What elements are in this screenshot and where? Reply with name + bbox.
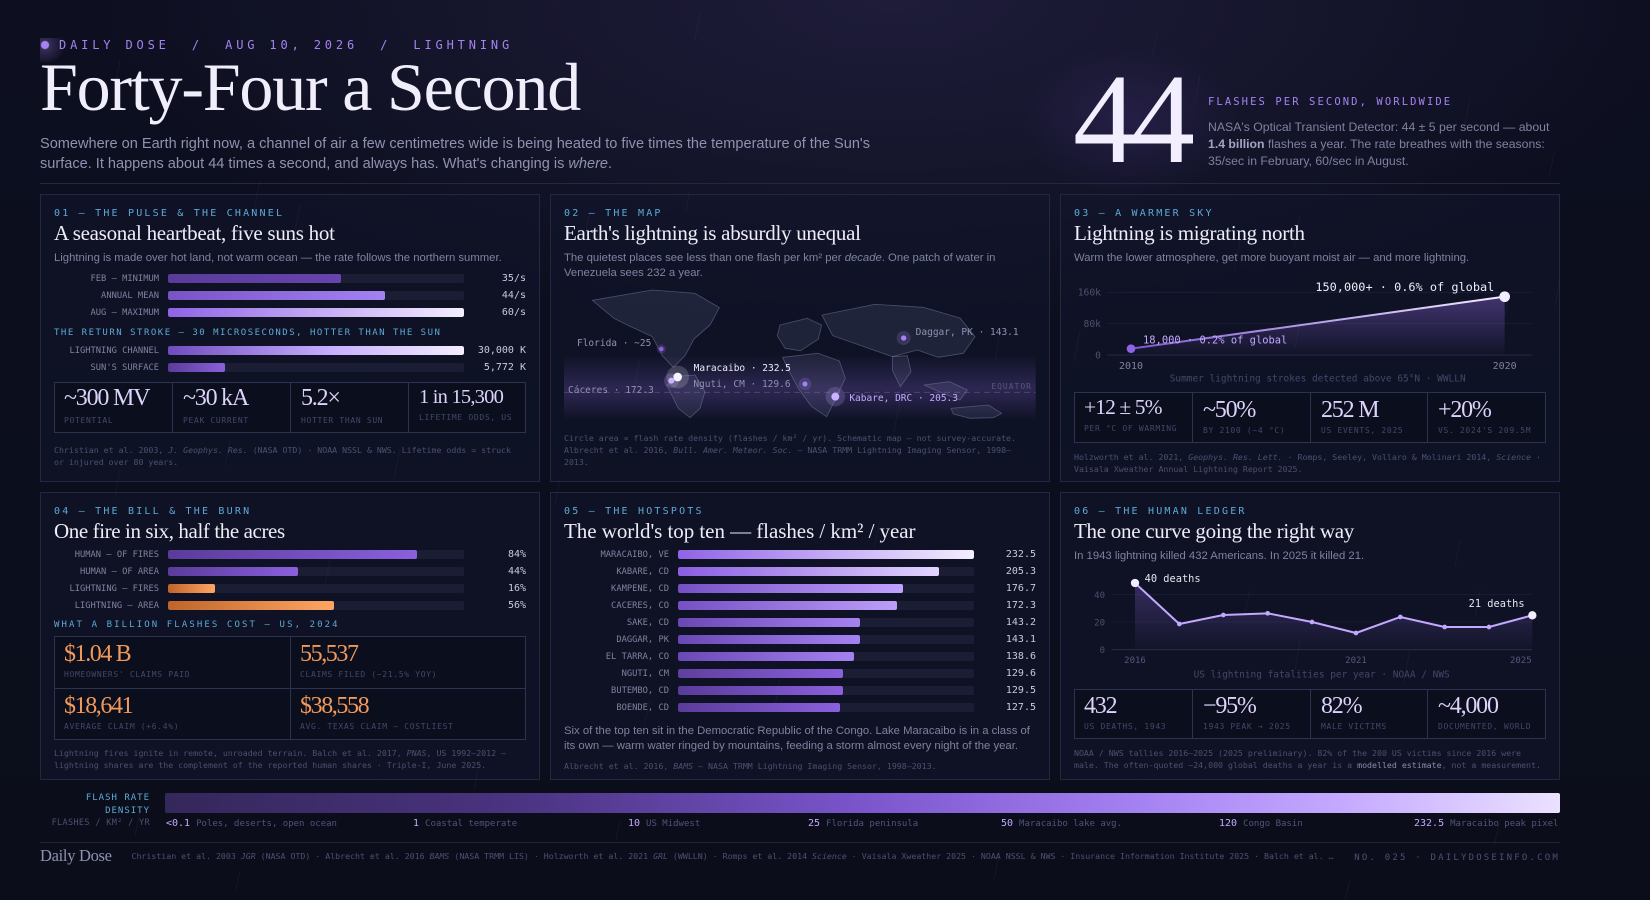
legend unit: FLASHES / KM² / YR	[52, 818, 150, 828]
bar: august	[90, 307, 526, 318]
bar: El Tarra: EL TARRA, CO	[606, 652, 669, 662]
map labels: Kabare, DRC · 205.3	[849, 393, 958, 404]
legend name: FLASH RATE	[86, 793, 150, 803]
map labels: Nguti, CM · 129.6	[693, 379, 791, 390]
bar: Daggar: 143.1	[1006, 634, 1036, 645]
stat: lifetime odds	[408, 382, 526, 433]
bar: human area	[80, 566, 526, 577]
bar: Maracaibo: 232.5	[1006, 549, 1036, 560]
x-axis labels	[1119, 361, 1517, 372]
bar: february: 35/s	[502, 273, 526, 284]
panel 6 footnote: NOAA / NWS tallies 2016–2025 (2025 preliminary). 82% of the 200 US victims since 2016 were	[1074, 748, 1521, 758]
bar: Kabare: KABARE, CD	[616, 567, 669, 577]
bar: Butembo	[611, 685, 1036, 696]
panel 5 heading: The world's top ten — flashes / km² / year	[564, 519, 916, 543]
footer citations: Christian et al. 2003 JGR (NASA OTD) · Albrecht et al. 2016 BAMS (NASA TRMM LIS) · Holzworth et al. 2021 GRL (WWLLN) · Romps et al. 2014 Science · Vaisala Xweather 2025 · NOAA NSSL & NWS · Insurance Information Institute 2025 · Balch et al. ………	[132, 851, 1336, 861]
bar: Maracaibo	[600, 549, 1036, 560]
panel 3 eyebrow: 03 — A WARMER SKY	[1074, 208, 1214, 219]
panel 4 footnote: lightning shares are the complement of the reported human shares · Triple-I, June 2025.	[54, 760, 486, 770]
x-axis labels: 2020	[1493, 361, 1517, 372]
point 2010	[1127, 344, 1135, 353]
stat: documented world	[1427, 689, 1546, 739]
bar: Boende	[616, 702, 1036, 713]
panel: the hotspots	[550, 492, 1050, 780]
x-axis labels	[1124, 656, 1532, 666]
panel 6 footnote	[1074, 747, 1541, 771]
hero description: 1.4 billion flashes a year. The rate breathes with the seasons:	[1208, 137, 1545, 151]
stat: male victims: MALE VICTIMS	[1321, 722, 1387, 731]
bar: annual mean	[101, 290, 526, 301]
legend gradient bar	[165, 793, 1560, 813]
hero description	[1208, 120, 1550, 168]
bar: Caceres: CACERES, CO	[611, 601, 669, 611]
stat: decline	[1192, 689, 1310, 739]
line chart: northern strokes	[1078, 280, 1532, 384]
dot: Florida	[657, 344, 666, 354]
stat: versus 2024: +20%	[1438, 397, 1491, 423]
hero description: NASA's Optical Transient Detector: 44 ± 5 per second — about	[1208, 120, 1549, 134]
stat: per degree: +12 ± 5%	[1084, 395, 1162, 419]
legend name	[86, 792, 150, 818]
x-axis labels: 2010	[1119, 361, 1143, 372]
stat: peak current: ~30 kA	[183, 385, 248, 411]
bar: Kampene	[611, 583, 1036, 594]
map labels	[568, 327, 1019, 404]
bar chart: seasonal rate	[90, 273, 526, 318]
legend stop: 120: 120 Congo Basin	[1219, 818, 1303, 829]
bar: Sake	[627, 617, 1036, 628]
continents	[592, 290, 1002, 418]
dot: Maracaibo	[666, 366, 689, 388]
bar: lightning channel	[69, 345, 526, 356]
map labels: Cáceres · 172.3	[568, 385, 654, 396]
stat row	[54, 382, 526, 433]
stat: us events	[1310, 392, 1427, 443]
dot: Nguti	[799, 378, 811, 390]
panel: the bill and the burn	[40, 492, 540, 780]
data points	[1177, 611, 1491, 635]
cost subheading: WHAT A BILLION FLASHES COST — US, 2024	[54, 620, 340, 630]
bar: Caceres: 172.3	[1006, 600, 1036, 611]
panel 6 heading: The one curve going the right way	[1074, 519, 1354, 543]
hero description: 35/sec in February, 60/sec in August.	[1208, 154, 1409, 168]
eyebrow text: DAILY DOSE / AUG 10, 2026 / LIGHTNING	[59, 38, 513, 52]
stat: us events: 252 M	[1321, 397, 1378, 423]
stat: potential: ~300 MV	[64, 385, 149, 411]
bar: human area: 44%	[508, 566, 526, 577]
bar: lightning channel: 30,000 K	[478, 345, 526, 356]
intro paragraph	[40, 136, 870, 172]
stat: lifetime odds: LIFETIME ODDS, US	[419, 413, 512, 422]
panel 2 description: Venezuela sees 232 a year.	[564, 267, 703, 279]
panel 3 footnote: Vaisala Xweather Annual Lightning Report 2025.	[1074, 464, 1302, 474]
y-axis labels: 0	[1100, 646, 1105, 656]
bar: lightning fires: LIGHTNING — FIRES	[69, 584, 159, 594]
panel 3 description: Warm the lower atmosphere, get more buoyant moist air — and more lightning.	[1074, 252, 1469, 264]
stat: by 2100: BY 2100 (~4 °C)	[1203, 426, 1285, 435]
schematic world map	[564, 290, 1036, 419]
hero label: FLASHES PER SECOND, WORLDWIDE	[1208, 96, 1452, 108]
panel 5 commentary: Six of the top ten sit in the Democratic Republic of the Congo. Lake Maracaibo is in a class of	[564, 725, 1030, 737]
y-axis labels: 40	[1094, 591, 1105, 601]
bar: august: 60/s	[502, 307, 526, 318]
stat: potential	[64, 385, 150, 425]
panel 6 footnote: male. The often-quoted ~24,000 global deaths a year is a modelled estimate, not a measurement.	[1074, 760, 1541, 770]
point 2020	[1499, 291, 1510, 302]
stat row	[1074, 689, 1546, 739]
bar: human fires: 84%	[508, 549, 526, 560]
label 150,000: 150,000+ · 0.6% of global	[1315, 280, 1494, 294]
stat: 1943 deaths: 432	[1084, 693, 1116, 719]
chart caption: Summer lightning strokes detected above 65°N · WWLLN	[1170, 373, 1466, 384]
panel 1 heading: A seasonal heartbeat, five suns hot	[54, 221, 335, 245]
intro paragraph: surface. It happens about 44 times a second, and always has. What's changing is where.	[40, 156, 612, 172]
bar: lightning area: 56%	[508, 600, 526, 611]
stat: hotter than sun	[290, 382, 408, 433]
panel: a warmer sky	[1060, 194, 1560, 482]
dot: Daggar	[897, 331, 911, 345]
panel 4 heading: One fire in six, half the acres	[54, 519, 285, 543]
legend title	[40, 792, 150, 829]
stat: texas claim: $38,558	[300, 693, 368, 719]
cost stats grid	[54, 636, 526, 740]
legend stop: 1: 1 Coastal temperate	[413, 818, 517, 829]
stat: documented world: DOCUMENTED, WORLD	[1438, 722, 1531, 731]
header rule	[40, 183, 1560, 184]
bar: Boende: 127.5	[1006, 702, 1036, 713]
legend stop: 50: 50 Maracaibo lake avg.	[1001, 818, 1122, 829]
footer rule	[40, 842, 1560, 843]
legend stop: under 0.1: <0.1 Poles, deserts, open ocean	[166, 818, 337, 829]
cell divider vertical	[290, 636, 291, 740]
bar: Daggar	[616, 634, 1036, 645]
panel 3 footnote	[1074, 452, 1541, 474]
bar chart: top ten	[600, 549, 1036, 713]
trend line	[1131, 297, 1505, 349]
bar: Kabare: 205.3	[1006, 566, 1036, 577]
header eyebrow	[40, 38, 513, 62]
bar: human area: HUMAN — OF AREA	[80, 567, 159, 577]
stat: potential: POTENTIAL	[64, 416, 113, 425]
bar: lightning fires: 16%	[508, 583, 526, 594]
panel 1 description: Lightning is made over hot land, not warm ocean — the rate follows the northern summer.	[54, 252, 502, 264]
bar: lightning area: LIGHTNING — AREA	[75, 601, 159, 611]
stat: by 2100	[1192, 392, 1310, 443]
gridlines	[1107, 292, 1532, 355]
x-axis labels: 2021	[1345, 656, 1367, 666]
stat: versus 2024: VS. 2024'S 209.5M	[1438, 426, 1531, 435]
bar: Daggar: DAGGAR, PK	[616, 635, 669, 645]
stat: male victims	[1310, 689, 1427, 739]
panel 2 footnote	[564, 433, 1016, 467]
panel 2 footnote: 2013.	[564, 457, 589, 467]
footer brand: Daily Dose	[40, 846, 112, 865]
panel: the pulse and the channel	[40, 194, 540, 482]
legend stop: 232.5: 232.5 Maracaibo peak pixel	[1414, 818, 1558, 829]
bar: february: FEB — MINIMUM	[91, 274, 159, 284]
bar: Kampene: KAMPENE, CD	[611, 584, 669, 594]
panel 4 eyebrow: 04 — THE BILL & THE BURN	[54, 506, 251, 517]
panel 2 heading: Earth's lightning is absurdly unequal	[564, 221, 861, 245]
bar chart: temperature	[69, 345, 526, 373]
point 2025	[1528, 611, 1536, 620]
legend stop: 25: 25 Florida peninsula	[808, 818, 918, 829]
x-axis labels: 2016	[1124, 656, 1146, 666]
stat: documented world: ~4,000	[1438, 693, 1498, 719]
y-axis labels: 160k	[1078, 288, 1101, 299]
bar: human fires: HUMAN — OF FIRES	[75, 550, 159, 560]
bar: sun surface: 5,772 K	[484, 362, 526, 373]
stat: hotter than sun: 5.2×	[301, 385, 340, 411]
fatalities line	[1135, 583, 1532, 633]
return stroke subheading: THE RETURN STROKE — 30 MICROSECONDS, HOTTER THAN THE SUN	[54, 328, 441, 338]
bar: Maracaibo: MARACAIBO, VE	[601, 550, 669, 560]
stat: decline: −95%	[1203, 693, 1256, 719]
stat: male victims: 82%	[1321, 693, 1361, 719]
stat: by 2100: ~50%	[1203, 397, 1255, 423]
panel 4 footnote	[54, 748, 506, 770]
panel: the map	[550, 194, 1050, 482]
label 40 deaths: 40 deaths	[1145, 573, 1201, 585]
bar: lightning fires	[69, 583, 526, 594]
bar: annual mean: 44/s	[502, 290, 526, 301]
panel 2 footnote: Circle area ∝ flash rate density (flashes / km² / yr). Schematic map — not survey-accurate.	[564, 433, 1016, 443]
stat: peak current	[172, 382, 290, 433]
panel 5 commentary	[564, 725, 1030, 752]
stat: claims filed: CLAIMS FILED (−21.5% YOY)	[300, 670, 437, 679]
bar: annual mean: ANNUAL MEAN	[101, 291, 159, 301]
bar: Boende: BOENDE, CD	[616, 703, 669, 713]
stat: average claim: AVERAGE CLAIM (+6.4%)	[64, 722, 179, 731]
bar: El Tarra	[606, 651, 1036, 662]
area under line	[1135, 583, 1532, 650]
panel 2 description	[564, 252, 995, 279]
map labels: Maracaibo · 232.5	[694, 363, 791, 374]
panel 1 eyebrow: 01 — THE PULSE & THE CHANNEL	[54, 208, 284, 219]
point 2016	[1131, 579, 1139, 587]
bar: sun surface	[91, 362, 526, 373]
bar: Butembo: 129.5	[1006, 685, 1036, 696]
equator label: EQUATOR	[991, 382, 1032, 391]
stat: hotter than sun: HOTTER THAN SUN	[301, 416, 383, 425]
bar: Nguti	[622, 668, 1036, 679]
y-axis labels: 80k	[1084, 319, 1101, 330]
bar: february	[91, 273, 526, 284]
stat: claims filed: 55,537	[300, 641, 358, 667]
bar: Kampene: 176.7	[1006, 583, 1036, 594]
stat: 1943 deaths: US DEATHS, 1943	[1084, 722, 1166, 731]
stat: claims filed	[300, 641, 437, 679]
panel 3 heading: Lightning is migrating north	[1074, 221, 1305, 245]
map labels: Florida · ~25	[577, 338, 651, 349]
bar: Sake: 143.2	[1006, 617, 1036, 628]
bar: El Tarra: 138.6	[1006, 651, 1036, 662]
stat: texas claim	[300, 693, 454, 731]
stat: per degree: PER °C OF WARMING	[1084, 424, 1177, 433]
stat: per degree	[1084, 395, 1177, 433]
stat: texas claim: AVG. TEXAS CLAIM — COSTLIEST	[300, 722, 454, 731]
panel 2 description: The quietest places see less than one flash per km² per decade. One patch of water in	[564, 252, 995, 264]
panel 5 eyebrow: 05 — THE HOTSPOTS	[564, 506, 704, 517]
title: Forty-Four a Second	[40, 49, 580, 125]
label 21 deaths: 21 deaths	[1469, 598, 1525, 610]
panel 1 footnote	[54, 445, 511, 467]
legend stop: 10: 10 US Midwest	[628, 818, 700, 829]
legend name: DENSITY	[105, 806, 150, 816]
panel 5 commentary: its own — warm water ringed by mountains, feeding a storm almost every night of the year.	[564, 740, 1018, 752]
bar: august: AUG — MAXIMUM	[91, 308, 159, 318]
equator band	[564, 355, 1036, 420]
stat row	[1074, 392, 1546, 443]
intro paragraph: Somewhere on Earth right now, a channel of air a few centimetres wide is being heated to five times the temperature of the Sun's	[40, 136, 870, 152]
panel 4 footnote: Lightning fires ignite in remote, unroaded terrain. Balch et al. 2017, PNAS, US 1992–2012 —	[54, 748, 506, 758]
bar: human fires	[75, 549, 526, 560]
stat: peak current: PEAK CURRENT	[183, 416, 249, 425]
glow behind the hero number	[1020, 45, 1240, 195]
panel 2 footnote: Albrecht et al. 2016, Bull. Amer. Meteor. Soc. — NASA TRMM Lightning Imaging Sensor, 1998–	[564, 445, 1011, 455]
stat: 1943 deaths	[1074, 689, 1192, 739]
equator line	[564, 391, 1036, 394]
bar chart: fire shares	[69, 549, 526, 611]
stat: us events: US EVENTS, 2025	[1321, 426, 1403, 435]
bar: sun surface: SUN'S SURFACE	[91, 363, 159, 373]
x-axis labels: 2025	[1510, 656, 1532, 666]
area under line	[1131, 297, 1505, 355]
map labels: Daggar, PK · 143.1	[916, 327, 1019, 338]
bar: Nguti: 129.6	[1006, 668, 1036, 679]
stat: claims paid	[64, 641, 190, 679]
y-axis labels	[1094, 591, 1105, 656]
bar: lightning area	[75, 600, 526, 611]
stat: versus 2024	[1427, 392, 1546, 443]
panel 2 eyebrow: 02 — THE MAP	[564, 208, 663, 219]
panel: the human ledger	[1060, 492, 1560, 780]
bar: Butembo: BUTEMBO, CD	[611, 686, 669, 696]
stat: lifetime odds: 1 in 15,300	[419, 386, 503, 408]
bar: lightning channel: LIGHTNING CHANNEL	[69, 346, 159, 356]
panel 6 eyebrow: 06 — THE HUMAN LEDGER	[1074, 506, 1247, 517]
y-axis labels	[1078, 288, 1101, 362]
stat: decline: 1943 PEAK → 2025	[1203, 722, 1291, 731]
panel 1 footnote: Christian et al. 2003, J. Geophys. Res. (NASA OTD) · NOAA NSSL & NWS. Lifetime odds = struck	[54, 445, 511, 455]
footer issue: NO. 025 · DAILYDOSEINFO.COM	[1354, 852, 1560, 862]
bar: Kabare	[616, 566, 1036, 577]
bar: Nguti: NGUTI, CM	[622, 669, 669, 679]
panel 6 description: In 1943 lightning killed 432 Americans. In 2025 it killed 21.	[1074, 550, 1364, 562]
stat: average claim: $18,641	[64, 693, 132, 719]
stat: claims paid: HOMEOWNERS' CLAIMS PAID	[64, 670, 190, 679]
panel 5 footnote: Albrecht et al. 2016, BAMS — NASA TRMM Lightning Imaging Sensor, 1998–2013.	[564, 761, 937, 771]
dot: Kabare	[826, 387, 845, 406]
panel 1 footnote: or injured over 80 years.	[54, 457, 178, 467]
stat: average claim	[64, 693, 179, 731]
bar: Caceres	[611, 600, 1036, 611]
icon: pulse dot	[40, 38, 64, 62]
panel 3 footnote: Holzworth et al. 2021, Geophys. Res. Lett. · Romps, Seeley, Vollaro & Molinari 2014, Science ·	[1074, 452, 1541, 462]
dot: Caceres	[664, 373, 679, 388]
gridlines	[1112, 595, 1532, 650]
bar: Sake: SAKE, CD	[627, 618, 669, 628]
hero number: 44	[1073, 48, 1189, 190]
stat: claims paid: $1.04 B	[64, 641, 130, 667]
y-axis labels: 0	[1095, 351, 1101, 362]
y-axis labels: 20	[1094, 618, 1105, 628]
cell divider horizontal	[54, 688, 526, 689]
label 18,000: 18,000 · 0.2% of global	[1143, 334, 1287, 346]
line chart: fatalities	[1060, 572, 1560, 680]
